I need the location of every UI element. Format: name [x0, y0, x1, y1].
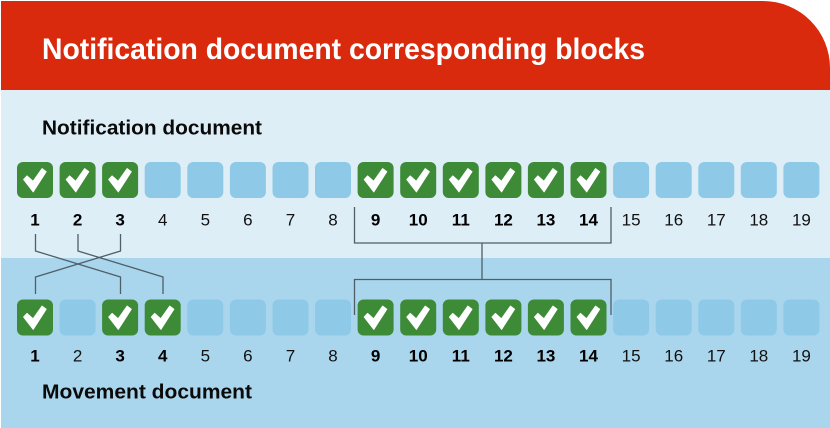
- movement block numbers: [30, 346, 811, 366]
- movement block numbers: 19: [792, 346, 811, 366]
- movement block numbers: 16: [664, 346, 683, 366]
- panel: notification background: [1, 90, 830, 258]
- movement block numbers: 1: [30, 346, 40, 366]
- movement block numbers: 4: [158, 346, 168, 366]
- movement block numbers: 7: [286, 346, 295, 366]
- bracket connector: blocks 9 to 14: [354, 207, 611, 315]
- notification block numbers: 8: [328, 210, 338, 230]
- movement block numbers: 14: [579, 346, 598, 366]
- notification block numbers: [30, 210, 811, 230]
- movement block numbers: 2: [73, 346, 82, 366]
- notification block numbers: 5: [201, 210, 210, 230]
- heading: movement document: Movement document: [42, 380, 252, 404]
- notification block numbers: 3: [115, 210, 125, 230]
- notification block numbers: 10: [409, 210, 428, 230]
- heading: notification document: Notification document: [42, 116, 262, 140]
- notification block numbers: 19: [792, 210, 811, 230]
- movement block numbers: 17: [707, 346, 726, 366]
- connector lines: blocks 1 to 3 remapped: [36, 234, 163, 294]
- notification block numbers: 14: [579, 210, 598, 230]
- notification block numbers: 16: [664, 210, 683, 230]
- panel: movement background: [1, 258, 830, 428]
- movement block numbers: 3: [115, 346, 125, 366]
- notification block numbers: 13: [536, 210, 555, 230]
- movement block numbers: 11: [452, 346, 470, 366]
- movement block numbers: 12: [494, 346, 513, 366]
- movement block numbers: 10: [409, 346, 428, 366]
- notification block numbers: 18: [749, 210, 768, 230]
- notification block numbers: 9: [371, 210, 380, 230]
- notification block numbers: 2: [73, 210, 82, 230]
- notification block numbers: 7: [286, 210, 295, 230]
- movement block numbers: 18: [749, 346, 768, 366]
- notification block numbers: 15: [622, 210, 641, 230]
- notification blocks row: [17, 162, 819, 198]
- notification block numbers: 17: [707, 210, 726, 230]
- notification block numbers: 6: [243, 210, 253, 230]
- notification block numbers: 11: [452, 210, 470, 230]
- title: Notification document corresponding blocks: [42, 33, 645, 66]
- movement block numbers: 6: [243, 346, 253, 366]
- notification block numbers: 4: [158, 210, 167, 230]
- notification block numbers: 12: [494, 210, 513, 230]
- movement block numbers: 8: [328, 346, 338, 366]
- movement block numbers: 15: [622, 346, 641, 366]
- movement blocks row: [17, 300, 819, 336]
- notification block numbers: 1: [30, 210, 40, 230]
- movement block numbers: 9: [371, 346, 380, 366]
- movement block numbers: 13: [536, 346, 555, 366]
- header band: [1, 1, 830, 90]
- movement block numbers: 5: [201, 346, 210, 366]
